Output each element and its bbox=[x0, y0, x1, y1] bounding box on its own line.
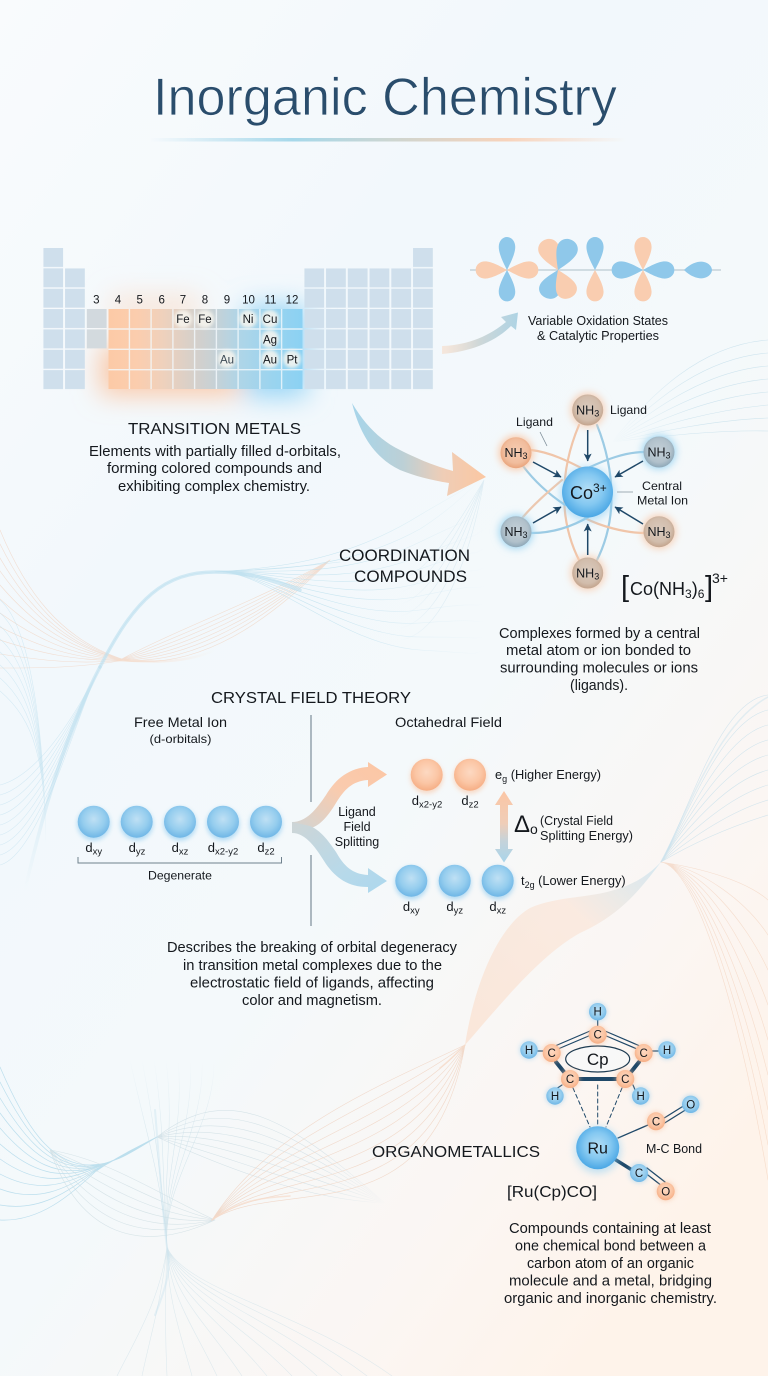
carbon atoms bbox=[542, 1025, 676, 1201]
eg orbital labels: x2-y2 bbox=[419, 800, 442, 810]
panel: crystal field theory bbox=[77, 690, 633, 1009]
group numbers: 8 bbox=[202, 294, 208, 306]
ligand formulas: NH bbox=[647, 446, 666, 460]
text: transition metals description bbox=[89, 444, 341, 495]
label: ligand left: Ligand bbox=[516, 415, 553, 429]
label: eg higher energy: g bbox=[502, 774, 507, 784]
element symbols: Au bbox=[263, 354, 277, 366]
text: crystal field description bbox=[167, 940, 458, 1009]
label: central metal ion: Central bbox=[642, 479, 682, 493]
text: organometallics description: one chemical bond between a bbox=[515, 1238, 706, 1254]
degenerate orbital labels: xz bbox=[179, 846, 189, 858]
arrow: splitting down bbox=[292, 822, 387, 893]
t2g orbital labels: d bbox=[446, 899, 454, 914]
element symbols: Au bbox=[220, 354, 234, 366]
atom labels: C bbox=[594, 1030, 602, 1042]
caption: variable oxidation states: & Catalytic Properties bbox=[537, 329, 659, 343]
label: t2g lower energy: t bbox=[521, 873, 525, 888]
atom labels: C bbox=[635, 1168, 643, 1180]
label: m-c bond: M-C Bond bbox=[646, 1142, 702, 1156]
label: free metal ion: (d-orbitals) bbox=[150, 732, 212, 746]
element symbols bbox=[176, 314, 298, 366]
element symbols: Fe bbox=[176, 314, 190, 326]
degenerate orbital labels bbox=[85, 840, 275, 858]
ligand formulas bbox=[504, 404, 671, 582]
element symbols: Cu bbox=[263, 314, 277, 326]
formula: Co(NH bbox=[630, 579, 685, 599]
diagram: cobalt complex bbox=[499, 393, 728, 603]
atom labels bbox=[525, 1007, 695, 1198]
central metal ion bbox=[562, 466, 613, 518]
group numbers: 5 bbox=[136, 294, 143, 306]
degenerate orbital labels: xy bbox=[93, 846, 102, 858]
group numbers: 9 bbox=[224, 294, 230, 306]
coordination arrows bbox=[533, 430, 643, 555]
label: octahedral field: Octahedral Field bbox=[395, 714, 502, 730]
periodic table glow bbox=[100, 295, 307, 397]
ligand formulas: NH bbox=[647, 525, 666, 539]
atom labels: H bbox=[551, 1091, 559, 1103]
atom labels: C bbox=[640, 1048, 648, 1060]
ligand formulas: 3 bbox=[666, 530, 671, 540]
heading: coordination compounds: COMPOUNDS bbox=[354, 567, 467, 586]
ligand formulas: NH bbox=[504, 446, 523, 460]
periodic table bbox=[43, 248, 434, 390]
element symbols: Ag bbox=[263, 334, 277, 346]
eg orbital labels: d bbox=[412, 793, 419, 808]
label: eg higher energy: e bbox=[495, 767, 502, 782]
formula: 6 bbox=[698, 587, 705, 601]
atom labels: H bbox=[637, 1091, 645, 1103]
group numbers bbox=[93, 294, 298, 306]
formula: ) bbox=[692, 579, 698, 599]
eg orbital labels: d bbox=[461, 793, 469, 808]
group numbers: 6 bbox=[158, 294, 165, 306]
group numbers: 3 bbox=[93, 294, 100, 306]
ligand formulas: NH bbox=[576, 404, 594, 418]
formula bbox=[621, 570, 728, 603]
element symbols: Fe bbox=[198, 314, 212, 326]
label: eg higher energy: (Higher Energy) bbox=[507, 767, 601, 782]
arrow: splitting up bbox=[292, 762, 387, 833]
text: coordination description: (ligands). bbox=[570, 678, 628, 694]
text: transition metals description: forming colored compounds and bbox=[107, 461, 322, 477]
formula: ruthenium complex: [Ru(Cp)CO] bbox=[507, 1184, 597, 1201]
degenerate orbital labels: d bbox=[172, 840, 179, 855]
t2g orbital labels: xz bbox=[497, 906, 506, 916]
eg orbitals bbox=[410, 759, 486, 794]
text: transition metals description: Elements with partially filled d-orbitals, bbox=[89, 444, 341, 460]
degenerate orbital labels: d bbox=[129, 840, 136, 855]
label: ligand top: Ligand bbox=[610, 403, 647, 417]
orbital 3 bbox=[586, 237, 604, 301]
text: coordination description: metal atom or ion bonded to bbox=[506, 643, 691, 659]
label: splitting energy: Splitting Energy) bbox=[540, 829, 633, 843]
label: ligand field splitting: Field bbox=[343, 820, 371, 834]
text: crystal field description: color and magnetism. bbox=[242, 993, 382, 1009]
label: ligand left bbox=[516, 415, 553, 446]
divider bbox=[310, 715, 312, 926]
caption: variable oxidation states bbox=[528, 314, 668, 343]
element highlights bbox=[174, 310, 301, 368]
element symbols: Pt bbox=[287, 354, 298, 366]
label: t2g lower energy: 2g bbox=[525, 880, 535, 890]
label: degenerate: Degenerate bbox=[148, 868, 212, 882]
ligand formulas: 3 bbox=[594, 572, 599, 582]
background waves bbox=[0, 340, 768, 1376]
label: central metal ion bbox=[617, 479, 688, 508]
text: crystal field description: electrostatic field of ligands, affecting bbox=[190, 976, 434, 992]
degenerate orbital labels: d bbox=[257, 840, 265, 855]
formula: [ bbox=[621, 571, 629, 603]
eg orbital labels bbox=[412, 793, 479, 810]
orbital 5 bbox=[684, 262, 712, 278]
atom labels: O bbox=[686, 1099, 695, 1111]
ruthenium label: Ru bbox=[587, 1140, 608, 1158]
group numbers: 11 bbox=[265, 294, 276, 306]
formula: 3+ bbox=[712, 570, 728, 586]
t2g orbital labels bbox=[403, 899, 506, 916]
text: organometallics description: carbon atom of an organic bbox=[527, 1256, 694, 1272]
element symbols: Ni bbox=[243, 314, 253, 326]
text: organometallics description: organic and inorganic chemistry. bbox=[504, 1291, 717, 1307]
bracket bbox=[78, 857, 282, 863]
heading: coordination compounds: COORDINATION bbox=[339, 546, 470, 565]
ruthenium glow bbox=[575, 1127, 621, 1173]
text: transition metals description: exhibiting complex chemistry. bbox=[118, 479, 310, 495]
bonds bbox=[538, 1020, 687, 1186]
ligand formulas: NH bbox=[504, 525, 523, 539]
ligand formulas: NH bbox=[576, 566, 594, 580]
text: coordination description: Complexes formed by a central bbox=[499, 626, 700, 642]
panel: organometallics bbox=[372, 1002, 717, 1307]
label: splitting energy: (Crystal Field bbox=[540, 814, 613, 828]
orbital 2 bbox=[535, 236, 581, 302]
cobalt label: Co bbox=[570, 483, 593, 503]
label: ligand field splitting bbox=[335, 805, 379, 849]
degenerate orbital labels: x2-y2 bbox=[215, 846, 238, 858]
hydrogen and oxygen atoms bbox=[520, 1002, 700, 1183]
degenerate orbitals bbox=[77, 806, 282, 840]
label: t2g lower energy: (Lower Energy) bbox=[535, 873, 626, 888]
t2g orbital labels: yz bbox=[454, 906, 463, 916]
label: free metal ion: Free Metal Ion bbox=[134, 714, 227, 730]
label: delta o: o bbox=[530, 821, 538, 837]
formula: 3 bbox=[685, 587, 692, 601]
ligand formulas: 3 bbox=[666, 450, 671, 460]
atom labels: O bbox=[661, 1186, 670, 1198]
ligand formulas: 3 bbox=[523, 451, 528, 461]
label: central metal ion: Metal Ion bbox=[637, 494, 688, 508]
orbitals row bbox=[470, 236, 721, 302]
atom labels: C bbox=[566, 1074, 574, 1086]
arrow: to orbitals bbox=[442, 312, 518, 354]
atom labels: C bbox=[548, 1048, 556, 1060]
degenerate orbital labels: d bbox=[85, 840, 93, 855]
degenerate orbital labels: d bbox=[208, 840, 215, 855]
ligand formulas: 3 bbox=[523, 530, 528, 540]
label: free metal ion bbox=[134, 714, 227, 746]
heading: crystal field theory: CRYSTAL FIELD THEORY bbox=[211, 690, 411, 707]
text: crystal field description: in transition metal complexes due to the bbox=[183, 958, 442, 974]
heading: coordination compounds bbox=[339, 546, 470, 586]
formula: ] bbox=[705, 571, 713, 603]
label: splitting energy bbox=[540, 814, 633, 843]
group numbers: 10 bbox=[242, 294, 255, 306]
orbital 4 bbox=[612, 237, 674, 301]
atom labels: C bbox=[621, 1074, 629, 1086]
ruthenium atom bbox=[576, 1126, 619, 1169]
caption: variable oxidation states: Variable Oxidation States bbox=[528, 314, 668, 328]
cp ring bbox=[566, 1046, 630, 1072]
t2g orbital labels: d bbox=[489, 899, 497, 914]
cobalt label: 3+ bbox=[593, 481, 607, 495]
orbital 1 bbox=[476, 237, 538, 301]
central metal glow bbox=[560, 467, 614, 521]
atom labels: H bbox=[594, 1007, 602, 1019]
ligand bonds bbox=[523, 425, 645, 562]
arrow: to coordination compounds bbox=[352, 403, 486, 496]
panel: transition metals bbox=[43, 248, 434, 495]
ligand spheres bbox=[499, 393, 676, 590]
ligand formulas: 3 bbox=[594, 408, 599, 418]
title underline bbox=[150, 138, 626, 142]
atom labels: H bbox=[663, 1045, 671, 1057]
cp label: Cp bbox=[587, 1050, 609, 1069]
label: delta o: Δ bbox=[514, 811, 530, 838]
atom labels: H bbox=[525, 1045, 533, 1057]
label: ligand field splitting: Ligand bbox=[338, 805, 376, 819]
t2g orbital labels: xy bbox=[410, 906, 420, 916]
group numbers: 7 bbox=[180, 294, 186, 306]
degenerate orbital labels: yz bbox=[136, 846, 146, 858]
text: coordination description bbox=[499, 626, 700, 694]
group numbers: 12 bbox=[286, 294, 298, 306]
text: organometallics description: molecule and a metal, bridging bbox=[509, 1274, 712, 1290]
eg orbital labels: z2 bbox=[469, 800, 479, 810]
text: organometallics description bbox=[504, 1221, 717, 1307]
heading: organometallics: ORGANOMETALLICS bbox=[372, 1144, 540, 1161]
text: organometallics description: Compounds containing at least bbox=[509, 1221, 711, 1237]
text: crystal field description: Describes the breaking of orbital degeneracy bbox=[167, 940, 458, 956]
atom labels: C bbox=[652, 1116, 660, 1128]
t2g orbital labels: d bbox=[403, 899, 410, 914]
t2g orbitals bbox=[395, 865, 514, 900]
group numbers: 4 bbox=[115, 294, 122, 306]
title: Inorganic Chemistry bbox=[153, 68, 617, 127]
text: coordination description: surrounding molecules or ions bbox=[500, 660, 698, 676]
degenerate orbital labels: z2 bbox=[265, 846, 275, 858]
molecule: cyclopentadienyl ruthenium bbox=[520, 1002, 702, 1201]
label: ligand field splitting: Splitting bbox=[335, 835, 379, 849]
arrow: splitting energy bbox=[495, 791, 513, 862]
heading: transition metals: TRANSITION METALS bbox=[128, 421, 301, 438]
